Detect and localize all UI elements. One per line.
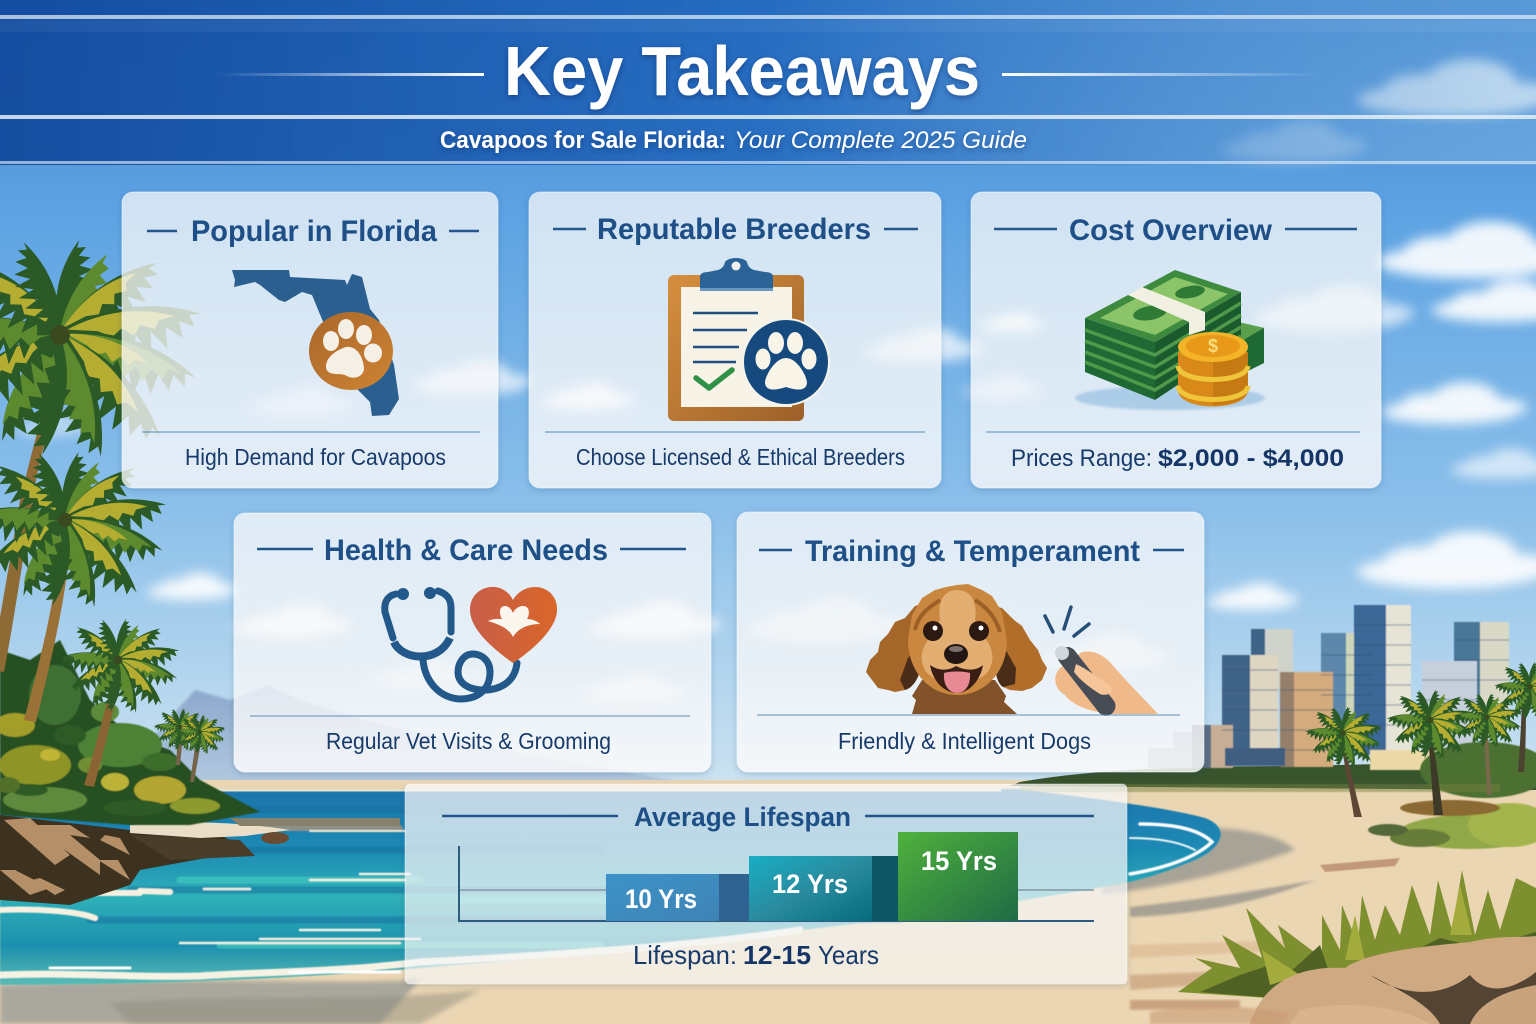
tree line bbox=[1010, 760, 1536, 790]
subtitle: Your Complete 2025 Guide bbox=[734, 127, 1027, 154]
caption: price range: $2,000 - $4,000 bbox=[1158, 445, 1344, 472]
icon: stethoscope and heart bbox=[385, 587, 557, 699]
right palms bbox=[1304, 661, 1536, 817]
panel: Cost Overview bbox=[971, 192, 1381, 488]
heading: Health & Care Needs: Health & Care Needs bbox=[324, 534, 608, 567]
sky clouds bbox=[13, 60, 1536, 704]
heading: Reputable Breeders: Reputable Breeders bbox=[597, 213, 871, 246]
bar: 10 years: 10 Yrs bbox=[625, 884, 697, 914]
panel: Popular in Florida bbox=[122, 192, 498, 488]
header band bbox=[0, 0, 1536, 165]
heading: Popular in Florida: Popular in Florida bbox=[191, 215, 437, 248]
right shore vegetation bbox=[1020, 742, 1536, 849]
icon: cash stack and coins bbox=[1075, 270, 1265, 410]
subtitle bbox=[440, 127, 1027, 154]
title bbox=[216, 32, 1320, 110]
left shore vegetation bbox=[0, 640, 260, 825]
icon: cash stack and coins: $ bbox=[1208, 336, 1218, 356]
caption: lifespan range: 12-15 bbox=[743, 940, 811, 970]
bar: 12 years bbox=[749, 856, 898, 921]
caption: High Demand for Cavapoos: High Demand for Cavapoos bbox=[185, 444, 446, 470]
mountains bbox=[150, 685, 700, 790]
panel: Average Lifespan bbox=[405, 784, 1127, 984]
skyline buildings bbox=[1148, 605, 1509, 770]
waves bbox=[0, 790, 1212, 976]
caption: Friendly & Intelligent Dogs: Friendly & Intelligent Dogs bbox=[838, 728, 1091, 754]
caption: price range bbox=[1011, 445, 1344, 472]
icon: Florida map with paw badge bbox=[232, 270, 399, 416]
subtitle: Cavapoos for Sale Florida: bbox=[440, 127, 726, 154]
panel: Training & Temperament bbox=[737, 512, 1204, 772]
bar: 15 years: 15 Yrs bbox=[921, 846, 997, 876]
foreground grass and rocks bbox=[1150, 870, 1536, 1024]
sea bbox=[0, 789, 1221, 985]
caption: Regular Vet Visits & Grooming: Regular Vet Visits & Grooming bbox=[326, 728, 611, 754]
bar chart: lifespan bbox=[459, 832, 1094, 921]
panel: Health & Care Needs bbox=[234, 513, 711, 772]
bar: 10 years bbox=[606, 874, 749, 921]
icon: puppy face bbox=[866, 584, 1047, 714]
heading: Average Lifespan: Average Lifespan bbox=[634, 802, 851, 832]
caption: lifespan range: Years bbox=[818, 940, 879, 970]
title: Key Takeaways bbox=[504, 32, 980, 110]
sand bbox=[0, 780, 1536, 1024]
panel: Reputable Breeders bbox=[529, 192, 941, 488]
icon: training clicker in hand bbox=[1045, 607, 1158, 719]
caption: Choose Licensed & Ethical Breeders: Choose Licensed & Ethical Breeders bbox=[576, 444, 905, 470]
bar: 15 years bbox=[898, 832, 1018, 921]
left shore rocks bbox=[0, 815, 400, 905]
bar: 12 years: 12 Yrs bbox=[772, 869, 848, 899]
heading: Cost Overview: Cost Overview bbox=[1069, 214, 1273, 247]
caption: lifespan range bbox=[633, 940, 879, 970]
heading: Training & Temperament: Training & Temperament bbox=[805, 535, 1140, 568]
icon: clipboard with paw badge bbox=[668, 258, 830, 421]
caption: price range: Prices Range: bbox=[1011, 445, 1152, 472]
left palms bbox=[0, 238, 227, 787]
caption: lifespan range: Lifespan: bbox=[633, 940, 737, 970]
